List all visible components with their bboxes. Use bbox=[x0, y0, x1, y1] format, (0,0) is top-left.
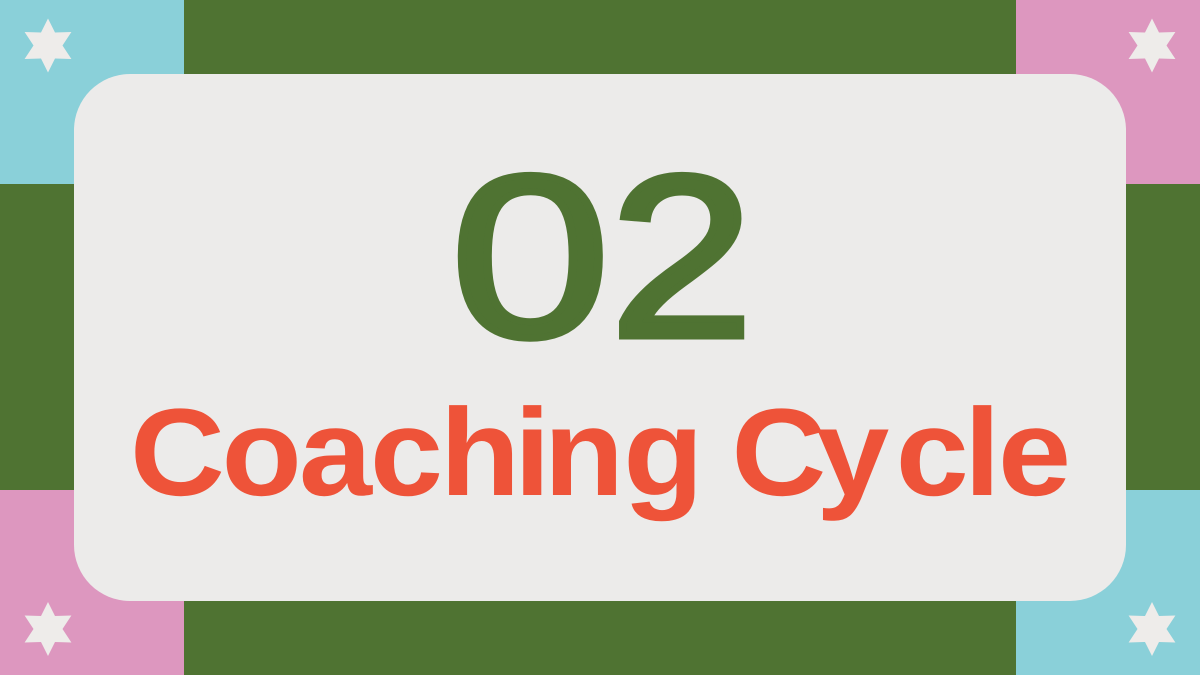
panel: bottom-right corner block with star bbox=[1016, 490, 1200, 675]
heading: section number bbox=[451, 127, 753, 385]
panel: top-left corner block with star bbox=[0, 0, 184, 184]
panel: bottom-left corner block with star bbox=[0, 490, 184, 675]
heading: section number: 0 bbox=[451, 127, 610, 385]
title: Coaching Cycle bbox=[130, 383, 1071, 522]
panel: central card bbox=[74, 74, 1126, 601]
panel: top-right corner block with star bbox=[1016, 0, 1200, 184]
heading: section number: 2 bbox=[610, 128, 753, 385]
